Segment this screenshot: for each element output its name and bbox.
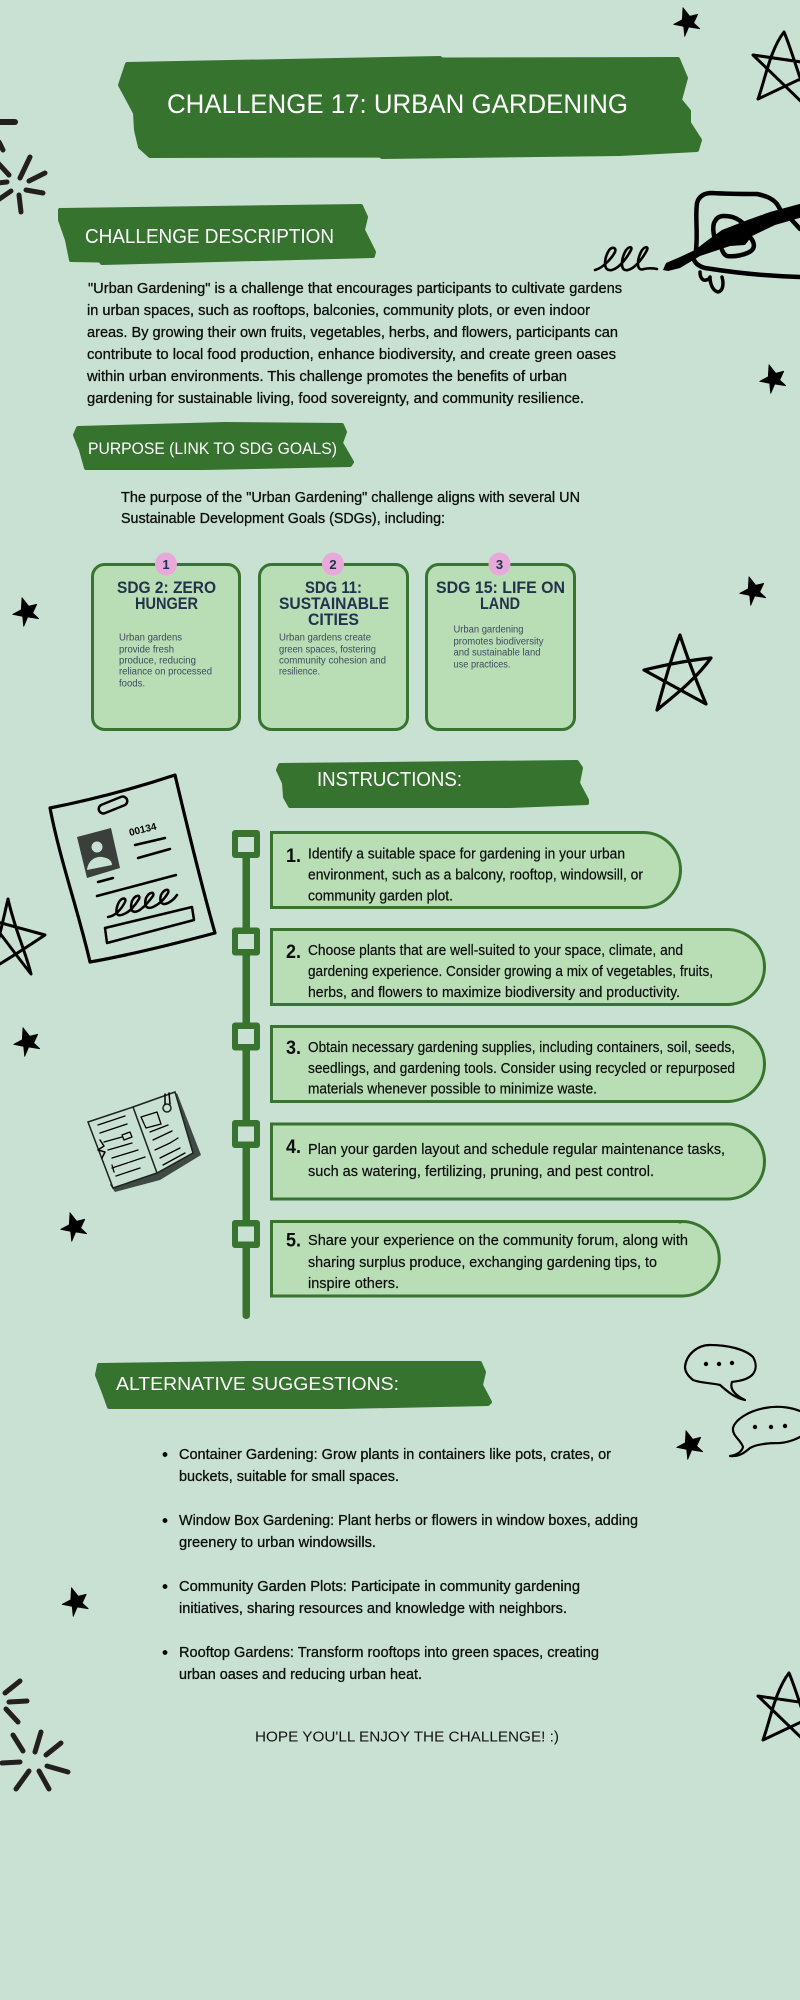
panel: SDG 11 card: Urban gardens create [279, 632, 371, 644]
heading banner: instructions [278, 762, 587, 806]
step 1 [272, 832, 680, 908]
panel: SDG 15 card: 3 [496, 557, 503, 572]
icon: small star below book [61, 1213, 87, 1241]
icon: speech bubbles [685, 1345, 800, 1456]
step 2 [272, 930, 764, 1004]
icon: ID card: 00134 [128, 821, 158, 839]
panel: SDG 11 card: SUSTAINABLE [279, 594, 389, 613]
panel: SDG 11 card [260, 552, 408, 730]
text block: purpose [121, 489, 580, 527]
panel: SDG 2 card: 1 [162, 557, 170, 572]
panel: SDG 15 card: LAND [480, 594, 520, 613]
step 5 [272, 1222, 719, 1296]
icon: hand writing with pen [595, 193, 800, 292]
panel: SDG 15 card: SDG 15: LIFE ON [436, 578, 565, 597]
bulleted list: suggestions: greenery to urban windowsills. [179, 1534, 376, 1551]
panel: SDG 15 card: and sustainable land [454, 648, 540, 658]
panel: SDG 15 card: promotes biodiversity [454, 636, 544, 648]
panel: SDG 2 card: foods. [119, 678, 145, 690]
heading banner: challenge description: CHALLENGE DESCRIPTION [85, 226, 334, 248]
step 1: community garden plot. [308, 888, 453, 904]
step 4: 4. [286, 1137, 301, 1158]
text block: description: "Urban Gardening" is a challenge that encourages participants to cultivate gardens [88, 280, 622, 297]
icon: small star left mid [14, 1028, 40, 1056]
icon: outline star left [0, 899, 45, 974]
heading banner: instructions: INSTRUCTIONS: [317, 769, 462, 791]
heading banner: purpose: PURPOSE (LINK TO SDG GOALS) [88, 440, 337, 458]
panel: SDG 15 card: Urban gardening [454, 624, 524, 636]
panel: SDG 11 card: green spaces, fostering [279, 644, 376, 656]
panel: SDG 15 card [426, 552, 574, 730]
panel: SDG 11 card: 2 [329, 557, 337, 572]
step 1: 1. [286, 846, 301, 867]
step 5: 5. [286, 1230, 301, 1252]
bulleted list: suggestions: Container Gardening: Grow plants in containers like pots, crates, or [179, 1446, 611, 1463]
icon: small star top [674, 8, 700, 36]
icon: small star left of cards [13, 598, 39, 626]
panel: SDG 2 card: SDG 2: ZERO [117, 578, 216, 597]
step 3: materials whenever possible to minimize waste. [308, 1082, 597, 1098]
step 4: Plan your garden layout and schedule regular maintenance tasks, [308, 1142, 725, 1158]
icon: ID card [50, 775, 215, 962]
icon: outline star bottom right [758, 1673, 800, 1753]
step 3: seedlings, and gardening tools. Consider using recycled or repurposed [308, 1061, 735, 1077]
bulleted list: suggestions [163, 1446, 638, 1683]
step 3: Obtain necessary gardening supplies, including containers, soil, seeds, [308, 1040, 735, 1056]
step 3: 3. [286, 1038, 301, 1059]
text block: purpose: Sustainable Development Goals (SDGs), including: [121, 510, 445, 527]
step 2: 2. [286, 942, 301, 963]
panel: SDG 2 card: Urban gardens [119, 632, 182, 644]
panel: SDG 2 card [92, 552, 240, 730]
timeline [232, 830, 260, 1319]
icon: outline star top right [753, 32, 800, 112]
icon: outline star middle right [644, 635, 711, 710]
panel: SDG 2 card: reliance on processed [119, 666, 212, 678]
step 5: sharing surplus produce, exchanging gardening tips, to [308, 1255, 657, 1271]
closing message: HOPE YOU'LL ENJOY THE CHALLENGE! :) [255, 1728, 559, 1746]
bulleted list: suggestions: Community Garden Plots: Participate in community gardening [179, 1578, 580, 1595]
panel: SDG 2 card: provide fresh [119, 644, 174, 656]
step 4 [272, 1124, 764, 1199]
bulleted list: suggestions: Window Box Gardening: Plant herbs or flowers in window boxes, adding [179, 1512, 638, 1529]
heading banner: challenge description [60, 206, 374, 263]
icon: open book [88, 1092, 201, 1192]
icon: small star lower left [62, 1588, 88, 1616]
icon: small star right [760, 365, 786, 393]
title banner: CHALLENGE 17: URBAN GARDENING [167, 89, 628, 119]
title banner [120, 58, 700, 157]
bulleted list: suggestions: initiatives, sharing resources and knowledge with neighbors. [179, 1600, 567, 1617]
text block: description: areas. By growing their own fruits, vegetables, herbs, and flowers, participants can [87, 324, 618, 341]
panel: SDG 2 card: produce, reducing [119, 656, 196, 666]
text block: description [86, 280, 622, 407]
step 1: environment, such as a balcony, rooftop, windowsill, or [308, 868, 643, 884]
step 1: Identify a suitable space for gardening in your urban [308, 846, 625, 862]
heading banner: alternative suggestions [97, 1363, 490, 1407]
bulleted list: suggestions: urban oases and reducing urban heat. [179, 1666, 422, 1683]
icon: small star near bubbles [677, 1431, 703, 1459]
icon: sunburst top left [0, 122, 45, 212]
step 5: Share your experience on the community forum, along with [308, 1233, 688, 1249]
panel: SDG 15 card: use practices. [454, 660, 510, 670]
icon: small star right of cards [740, 577, 766, 605]
bulleted list: suggestions: Rooftop Gardens: Transform rooftops into green spaces, creating [179, 1644, 599, 1661]
step 4: such as watering, fertilizing, pruning, and pest control. [308, 1164, 654, 1180]
panel: SDG 11 card: community cohesion and [279, 656, 386, 666]
step 2: gardening experience. Consider growing a mix of vegetables, fruits, [308, 964, 713, 980]
text block: description: in urban spaces, such as rooftops, balconies, community plots, or even indoor [87, 302, 590, 319]
panel: SDG 11 card: resilience. [279, 666, 320, 678]
text block: description: contribute to local food production, enhance biodiversity, and create green oases [87, 346, 616, 363]
panel: SDG 2 card: HUNGER [135, 594, 198, 613]
text block: description: within urban environments. This challenge promotes the benefits of urban [86, 368, 567, 385]
step 5: inspire others. [308, 1276, 399, 1292]
step 3 [272, 1026, 764, 1102]
icon: sunburst bottom left [2, 1681, 68, 1789]
text block: description: gardening for sustainable living, food sovereignty, and community resilience. [87, 390, 584, 407]
bulleted list: suggestions: buckets, suitable for small spaces. [179, 1468, 399, 1485]
step 2: Choose plants that are well-suited to your space, climate, and [308, 943, 683, 959]
heading banner: purpose [75, 424, 352, 468]
heading banner: alternative suggestions: ALTERNATIVE SUGGESTIONS: [116, 1373, 399, 1394]
text block: purpose: The purpose of the "Urban Gardening" challenge aligns with several UN [121, 489, 580, 506]
panel: SDG 11 card: CITIES [308, 610, 359, 629]
step 2: herbs, and flowers to maximize biodiversity and productivity. [308, 985, 680, 1001]
panel: SDG 11 card: SDG 11: [305, 578, 362, 597]
